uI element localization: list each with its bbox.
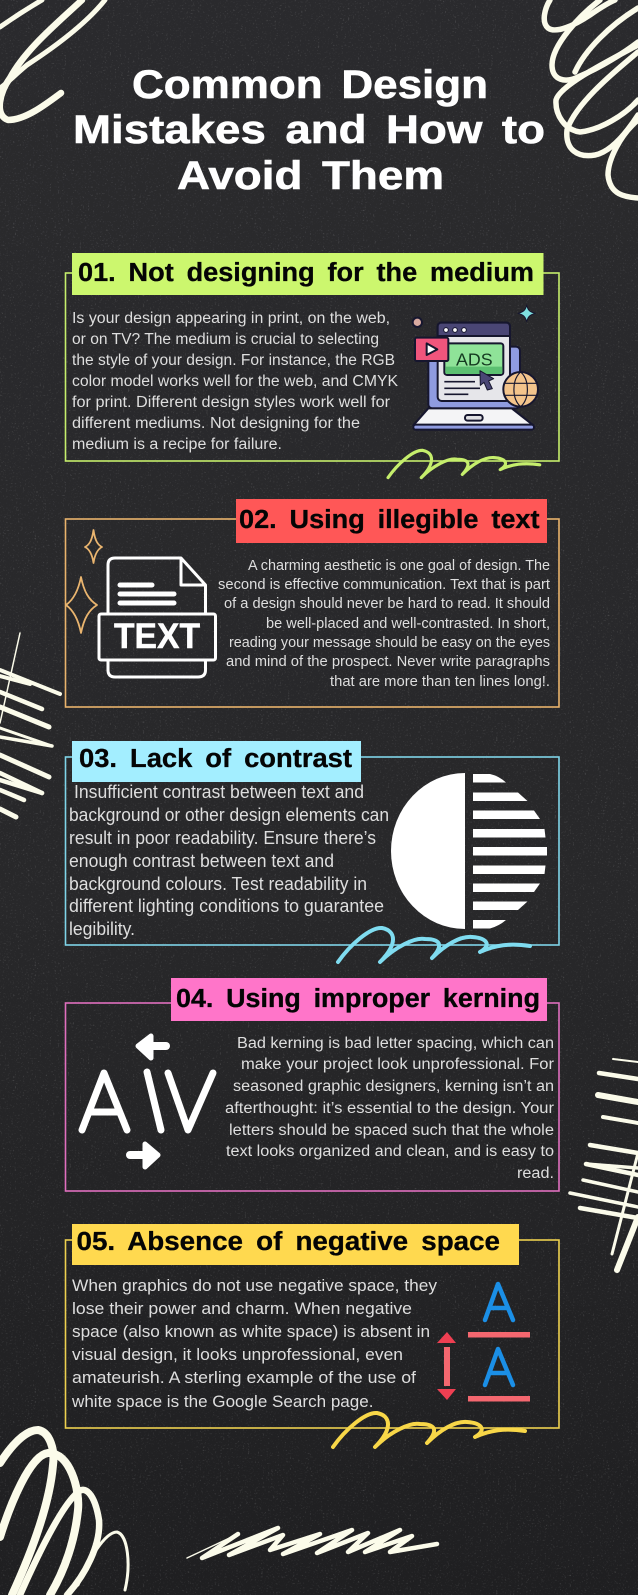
- body text 01: or on TV? The medium is crucial to selecting: [72, 331, 379, 348]
- icon: spacing letters: [437, 1284, 530, 1402]
- icon: laptop with ads: ADS: [456, 350, 493, 370]
- heading 03: [72, 741, 361, 782]
- body text 01: different mediums. Not designing for the: [72, 415, 360, 432]
- scribble: bottom centre: [187, 1528, 437, 1558]
- heading 05: [72, 1224, 519, 1265]
- scribble: top left: [0, 0, 105, 120]
- panel border: [66, 757, 559, 945]
- body text 05: When graphics do not use negative space, they: [72, 1277, 438, 1295]
- body text 03: legibility.: [69, 919, 135, 939]
- body text 02: A charming aesthetic is one goal of design. The: [248, 557, 550, 574]
- title: [73, 63, 545, 198]
- scribble: green: [388, 450, 540, 478]
- scribble: top right: [544, 0, 638, 198]
- body text 04: text looks organized and clean, and is easy to: [226, 1143, 554, 1160]
- heading 02: [236, 499, 547, 543]
- panel: 03 lack of contrast: [66, 741, 559, 962]
- icon: sparkles: [66, 530, 102, 633]
- body text 04: make your project look unprofessional. For: [241, 1056, 554, 1073]
- scribble: cyan: [338, 928, 530, 962]
- heading 01: 01. Not designing for the medium: [78, 259, 534, 287]
- body text 01: Is your design appearing in print, on the web,: [72, 310, 390, 327]
- body text 05: white space is the Google Search page.: [71, 1393, 373, 1411]
- body text 04: [225, 1035, 554, 1182]
- body text 02: that are more than ten lines long!.: [330, 673, 550, 690]
- body text 04: read.: [517, 1165, 554, 1182]
- heading 04: [171, 978, 547, 1021]
- scribble: right side: [570, 1059, 638, 1270]
- scribble: yellow: [333, 1413, 525, 1447]
- body text 03: background or other design elements can: [69, 805, 389, 825]
- panel border: [66, 519, 559, 707]
- body text 03: [69, 782, 389, 939]
- heading 05: 05. Absence of negative space: [76, 1228, 500, 1256]
- scribble: bottom left: [0, 1430, 128, 1595]
- panel border: [66, 1003, 559, 1191]
- body text 01: for print. Different design styles work well for: [72, 394, 390, 411]
- body text 04: seasoned graphic designers, kerning isn’t an: [233, 1078, 554, 1095]
- icon: kerning A V with arrows: [82, 1036, 213, 1167]
- title: Avoid Them: [177, 154, 444, 198]
- heading 02: 02. Using illegible text: [239, 506, 540, 534]
- icon: laptop with ads: [413, 305, 538, 430]
- icon: text document: [99, 558, 216, 677]
- panel: 05 absence of negative space: [66, 1224, 559, 1447]
- body text 02: be well-placed and well-contrasted. In short,: [266, 615, 550, 632]
- panel border: [66, 273, 559, 461]
- body text 03: background colours. Test readability in: [69, 874, 367, 894]
- body text 01: color model works well for the web, and CMYK: [72, 373, 399, 390]
- body text 05: lose their power and charm. When negative: [72, 1300, 412, 1318]
- body text 03: enough contrast between text and: [69, 851, 334, 871]
- body text 05: visual design, it looks unprofessional, even: [72, 1346, 403, 1364]
- body text 03: different lighting conditions to guarantee: [69, 896, 384, 916]
- heading 04: 04. Using improper kerning: [176, 985, 540, 1013]
- body text 04: Bad kerning is bad letter spacing, which can: [237, 1035, 554, 1052]
- body text 01: [72, 310, 399, 453]
- body text 02: reading your message should be easy on the eyes: [229, 634, 550, 651]
- heading 01: [72, 253, 544, 295]
- body text 03: result in poor readability. Ensure there’s: [69, 828, 376, 848]
- scribble: left side: [0, 633, 60, 817]
- panel: 01 not designing for the medium: [66, 253, 559, 478]
- body text 04: letters should be spaced such that the whole: [229, 1122, 554, 1139]
- body text 02: second is effective communication. Text that is part: [218, 576, 551, 593]
- body text 01: medium is a recipe for failure.: [72, 436, 282, 453]
- heading 03: 03. Lack of contrast: [79, 745, 353, 773]
- body text 04: afterthought: it’s essential to the design. Your: [225, 1100, 554, 1117]
- body text 05: [71, 1277, 438, 1411]
- body text 02: and mind of the prospect. Never write paragraphs: [226, 653, 550, 670]
- body text 03: Insufficient contrast between text and: [74, 782, 364, 802]
- body text 01: the style of your design. For instance, the RGB: [72, 352, 395, 369]
- title: Common Design: [132, 63, 488, 107]
- panel border: [66, 1240, 559, 1428]
- body text 02: [218, 557, 551, 690]
- icon: text document: TEXT: [114, 617, 200, 656]
- panel: 02 using illegible text: [66, 499, 559, 707]
- title: Mistakes and How to: [73, 108, 545, 152]
- panel: 04 using improper kerning: [66, 978, 559, 1191]
- body text 02: of a design should never be hard to read. It should: [224, 595, 550, 612]
- body text 05: space (also known as white space) is absent in: [72, 1323, 430, 1341]
- body text 05: amateurish. A sterling example of the use of: [72, 1369, 416, 1387]
- icon: half circle contrast: [391, 773, 547, 929]
